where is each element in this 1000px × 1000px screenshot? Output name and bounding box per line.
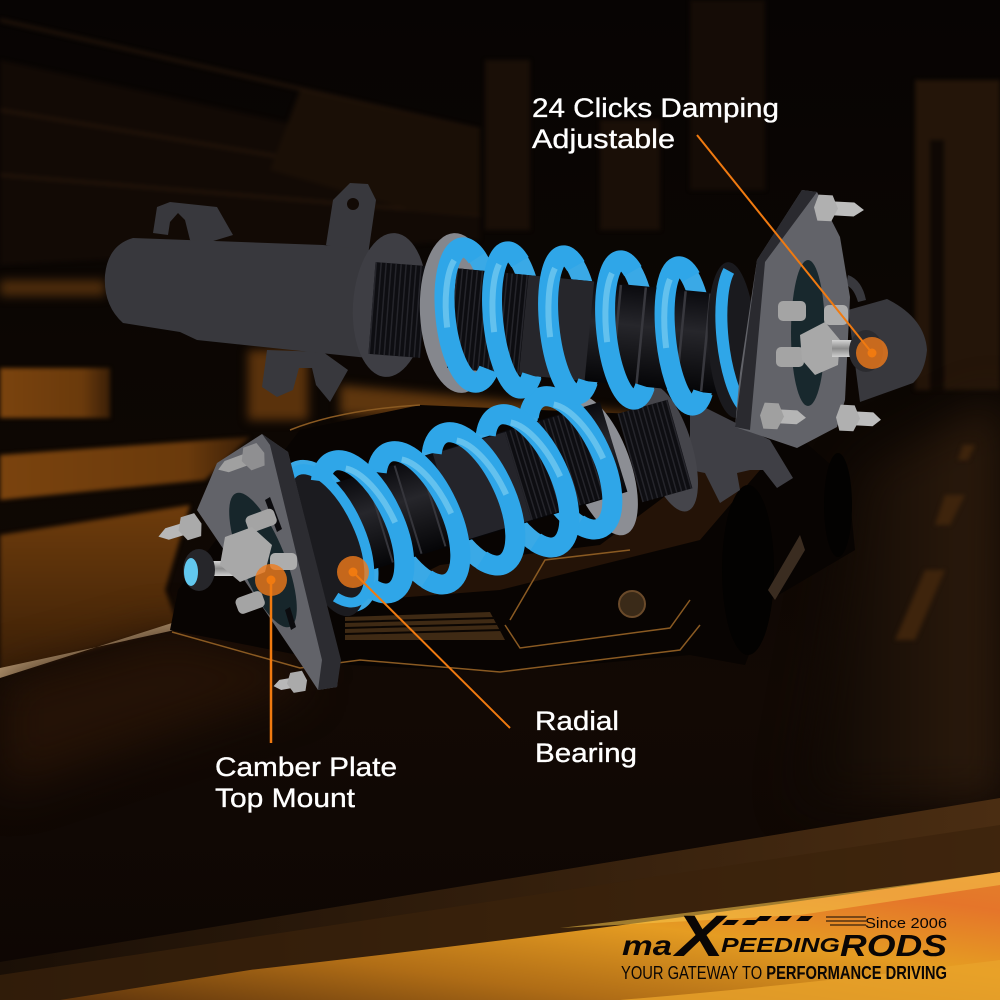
spring front arcs	[438, 246, 743, 408]
lower tube body	[105, 238, 370, 358]
spring collar dish	[348, 231, 432, 379]
lower coilover strut	[155, 378, 793, 696]
mounting brackets	[153, 183, 376, 402]
bolts	[244, 507, 278, 534]
orange glow road streaks	[0, 280, 1000, 800]
studs	[214, 442, 268, 481]
camber plate	[735, 190, 883, 448]
speed lines	[826, 917, 866, 925]
silver ring	[416, 231, 500, 395]
hex nut and stem	[800, 322, 840, 375]
rear tube	[846, 275, 927, 402]
logo: maXpeedingRods: Since 2006	[865, 915, 947, 932]
logo: maXpeedingRods: X	[672, 904, 728, 969]
damper body	[447, 268, 745, 396]
buildings	[0, 0, 1000, 390]
rear bracket	[690, 400, 793, 503]
callout: camber plate top mount: Camber Plate	[215, 752, 397, 782]
upper coilover strut	[105, 183, 927, 448]
callout: 24 clicks damping adjustable: Adjustable	[532, 124, 675, 154]
adjuster knob	[183, 549, 215, 591]
car silhouette	[170, 405, 855, 672]
studs	[813, 194, 865, 223]
logo: maXpeedingRods: RODS	[840, 928, 947, 963]
damper body	[327, 402, 627, 575]
threaded section behind collar	[372, 308, 424, 312]
callout: camber plate top mount	[215, 564, 397, 813]
spring back arcs	[268, 384, 629, 615]
hub disc	[704, 261, 760, 419]
spring front arcs	[280, 384, 630, 609]
hex nut and stem	[200, 561, 235, 576]
logo: maXpeedingRods: PEEDING	[721, 935, 840, 957]
logo: maXpeedingRods: YOUR GATEWAY TO PERFORMANCE DRIVING	[621, 963, 947, 983]
adjuster knob	[849, 330, 883, 372]
bolts	[778, 301, 806, 321]
spring back arcs	[439, 245, 712, 408]
callout: 24 clicks damping adjustable	[532, 93, 888, 369]
bottom swoosh band	[0, 798, 1000, 1000]
hub disc	[275, 457, 381, 625]
spring collar dish	[626, 378, 710, 518]
callout: camber plate top mount: Top Mount	[215, 783, 356, 813]
callout: radial bearing: Radial	[535, 706, 619, 736]
threaded section behind collar	[630, 444, 680, 458]
camber plate	[155, 434, 341, 696]
callout: 24 clicks damping adjustable: 24 Clicks Damping	[532, 93, 779, 123]
logo: maXpeedingRods: ma	[622, 930, 672, 961]
callout: radial bearing	[337, 556, 637, 768]
logo: maXpeedingRods	[621, 904, 947, 983]
silver ring	[546, 385, 654, 545]
callout: radial bearing: Bearing	[535, 738, 637, 768]
checker stripe	[722, 916, 813, 925]
